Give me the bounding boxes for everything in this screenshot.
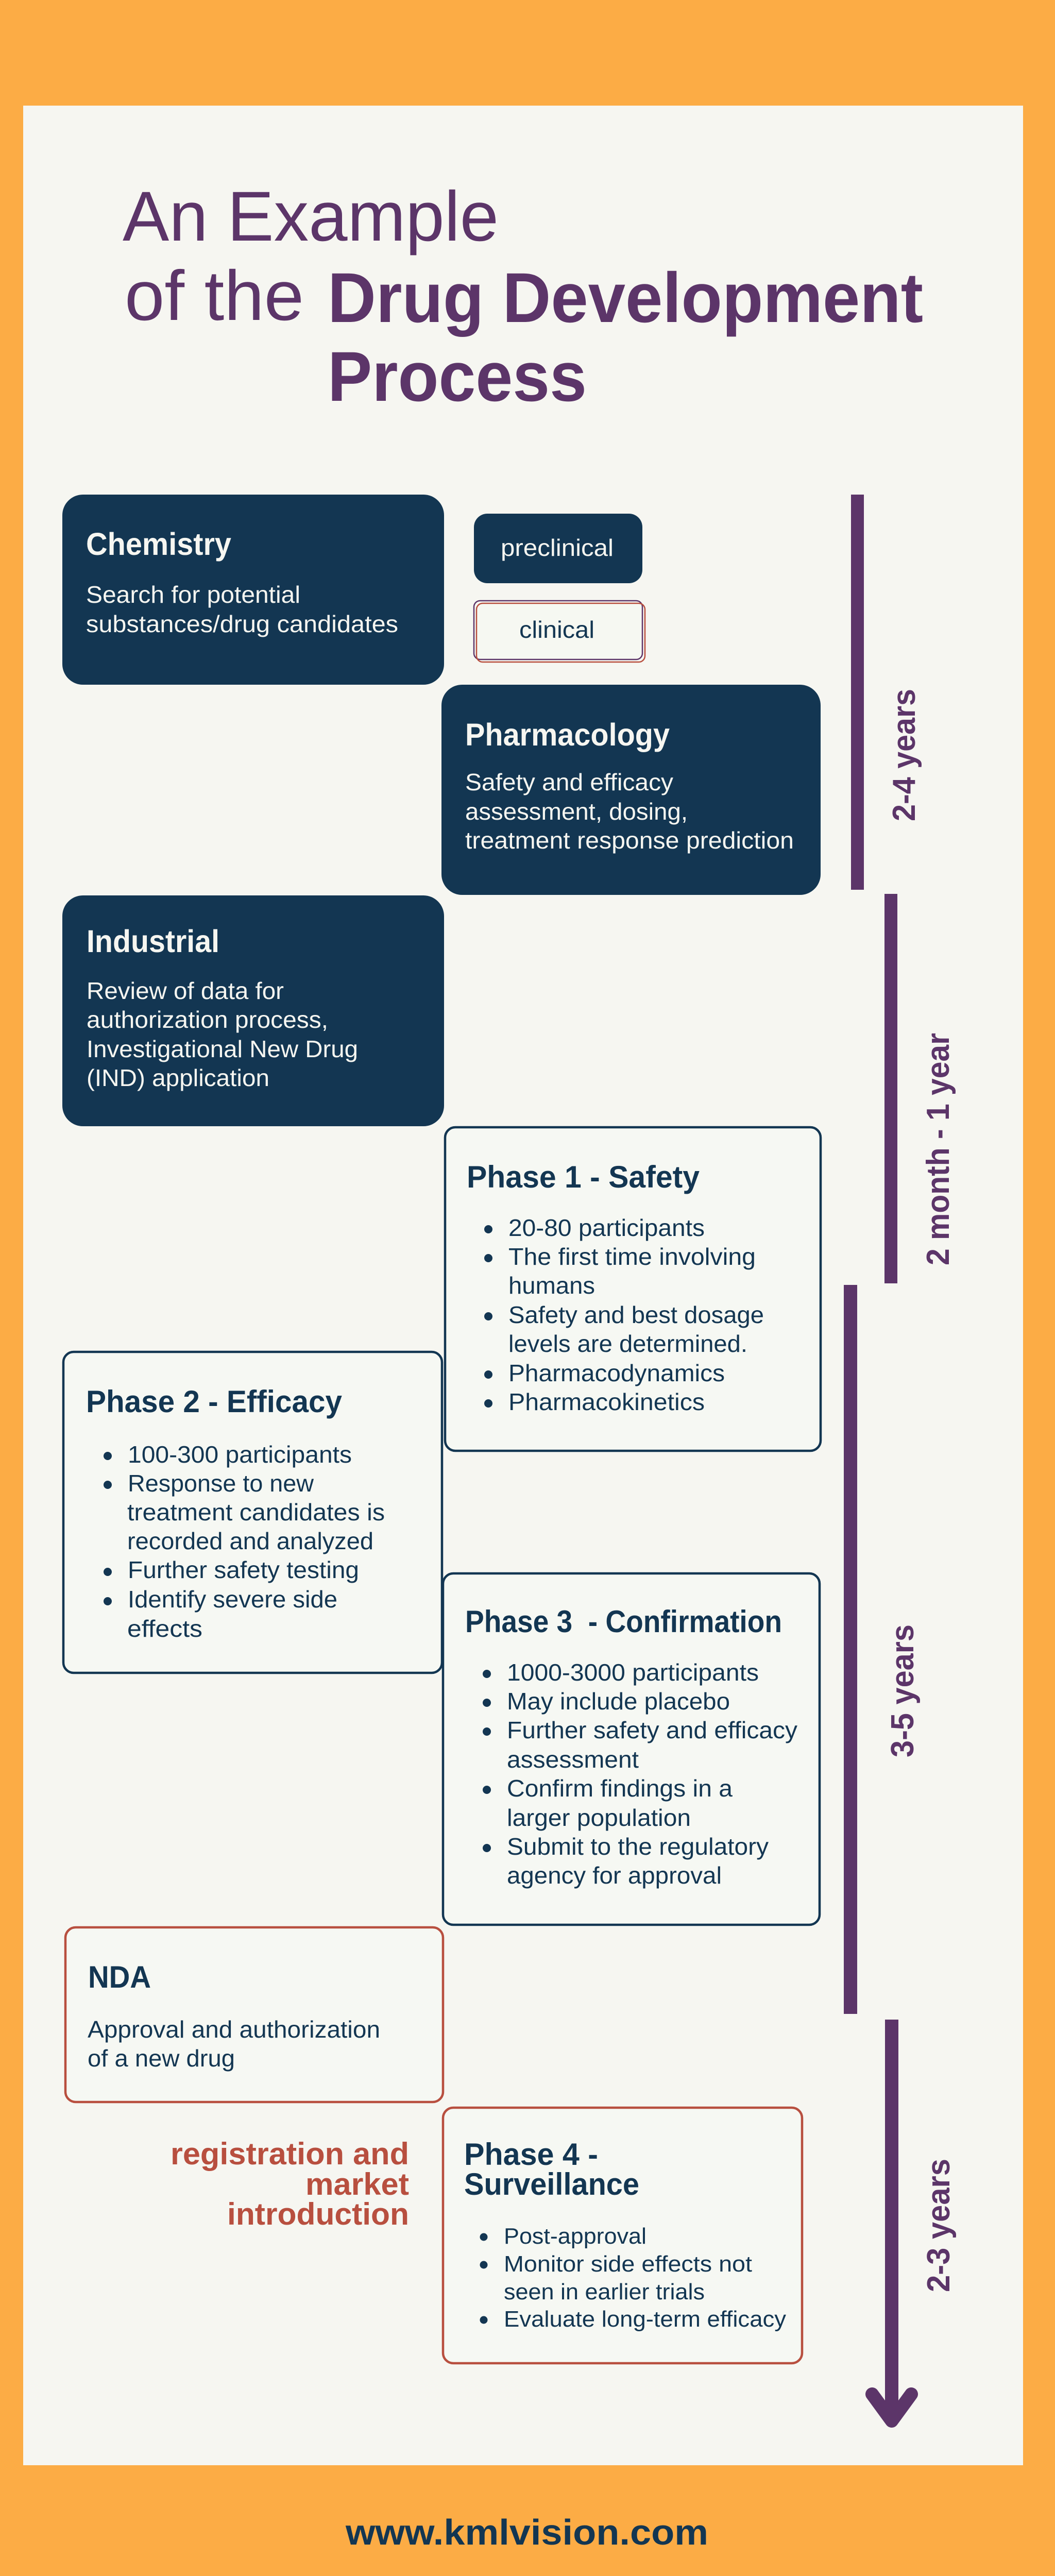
timeline bar: 2 month - 1 year: 2 month - 1 year xyxy=(921,1033,956,1265)
list: phase 3: assessment xyxy=(507,1746,639,1773)
list: phase 1: Pharmacodynamics xyxy=(508,1360,725,1386)
text: chemistry description xyxy=(86,581,398,637)
heading: NDA: NDA xyxy=(88,1960,151,1994)
text: industrial description: Review of data for xyxy=(87,977,284,1004)
panel: industrial xyxy=(62,895,444,1126)
text: NDA description xyxy=(88,2016,380,2072)
panel: phase 3 xyxy=(443,1573,820,1925)
heading: phase 4: Phase 4 - xyxy=(464,2137,598,2172)
list: phase 1: levels are determined. xyxy=(508,1330,747,1357)
text: industrial description: Investigational New Drug xyxy=(87,1036,358,1062)
list: phase 4: Monitor side effects not xyxy=(504,2251,752,2277)
title: An Example xyxy=(123,177,499,256)
heading: chemistry: Chemistry xyxy=(86,527,231,562)
list: phase 1: Pharmacokinetics xyxy=(508,1388,705,1415)
text: registration and market introduction: introduction xyxy=(227,2197,409,2231)
list: phase 4: seen in earlier trials xyxy=(504,2279,705,2304)
heading: phase 4: Surveillance xyxy=(464,2167,639,2201)
list: phase 3: Submit to the regulatory xyxy=(507,1833,769,1860)
footer url: www.kmlvision.com xyxy=(345,2512,708,2552)
list: phase 2 xyxy=(104,1441,385,1642)
timeline bar: 2 month - 1 year xyxy=(884,894,956,1283)
heading: phase 4 xyxy=(464,2137,639,2201)
list: phase 4: Post-approval xyxy=(504,2224,646,2249)
list: phase 3: Confirm findings in a xyxy=(507,1775,733,1802)
title xyxy=(123,177,923,416)
legend: clinical: clinical xyxy=(519,616,594,643)
list: phase 3: May include placebo xyxy=(507,1688,730,1715)
text: NDA description: Approval and authorization xyxy=(88,2016,380,2043)
panel: phase 1 xyxy=(445,1127,821,1451)
timeline bar: 3-5 years: 3-5 years xyxy=(885,1624,921,1757)
legend: clinical xyxy=(474,601,645,662)
timeline bar: 2-4 years xyxy=(851,495,922,890)
heading: phase 3: Phase 3 - Confirmation xyxy=(465,1604,782,1639)
heading: pharmacology: Pharmacology xyxy=(465,717,670,752)
timeline bar: 2-4 years: 2-4 years xyxy=(887,689,922,821)
text: registration and market introduction xyxy=(171,2137,409,2231)
list: phase 1: humans xyxy=(508,1272,595,1299)
list: phase 4 xyxy=(480,2224,786,2332)
timeline bar: 3-5 years xyxy=(844,1285,921,2014)
text: pharmacology description: Safety and efficacy xyxy=(465,769,673,795)
list: phase 3 xyxy=(483,1659,797,1889)
text: registration and market introduction: registration and xyxy=(171,2137,409,2171)
text: chemistry description: Search for potential xyxy=(86,581,300,608)
list: phase 1: The first time involving xyxy=(508,1243,756,1270)
list: phase 3: 1000-3000 participants xyxy=(507,1659,759,1686)
title: Drug Development xyxy=(328,259,923,337)
text: NDA description: of a new drug xyxy=(88,2045,235,2072)
legend: preclinical: preclinical xyxy=(501,534,614,561)
list: phase 1: 20-80 participants xyxy=(508,1214,705,1241)
arrow: 2-3 years: 2-3 years xyxy=(921,2159,957,2292)
panel: phase 4 xyxy=(443,2108,802,2363)
text: registration and market introduction: market xyxy=(305,2167,409,2201)
text: pharmacology description: treatment response prediction xyxy=(465,827,794,854)
list: phase 2: Further safety testing xyxy=(128,1556,359,1583)
list: phase 2: recorded and analyzed xyxy=(127,1528,373,1554)
list: phase 2: effects xyxy=(127,1615,202,1642)
list: phase 3: Further safety and efficacy xyxy=(507,1717,797,1743)
arrow: 2-3 years xyxy=(872,2020,957,2421)
text: industrial description: (IND) application xyxy=(87,1064,269,1091)
list: phase 1 xyxy=(484,1214,764,1415)
text: industrial description: authorization process, xyxy=(87,1006,328,1033)
text: chemistry description: substances/drug candidates xyxy=(86,611,398,637)
title: Process xyxy=(328,337,587,416)
list: phase 3: agency for approval xyxy=(507,1862,722,1889)
panel: NDA xyxy=(65,1927,443,2102)
panel: pharmacology xyxy=(441,685,821,895)
panel: chemistry xyxy=(62,495,444,685)
title: of the xyxy=(125,257,304,335)
legend: preclinical xyxy=(474,514,642,583)
list: phase 3: larger population xyxy=(507,1804,691,1831)
panel: phase 2 xyxy=(63,1352,442,1673)
heading: phase 1: Phase 1 - Safety xyxy=(467,1160,700,1194)
list: phase 2: treatment candidates is xyxy=(127,1499,385,1526)
list: phase 2: Response to new xyxy=(128,1470,314,1497)
heading: industrial: Industrial xyxy=(87,924,219,959)
list: phase 1: Safety and best dosage xyxy=(508,1301,764,1328)
heading: phase 2: Phase 2 - Efficacy xyxy=(86,1384,343,1419)
text: industrial description xyxy=(87,977,358,1091)
text: pharmacology description xyxy=(465,769,794,854)
list: phase 2: Identify severe side xyxy=(128,1586,337,1613)
list: phase 4: Evaluate long-term efficacy xyxy=(504,2307,786,2332)
text: pharmacology description: assessment, dosing, xyxy=(465,798,688,825)
list: phase 2: 100-300 participants xyxy=(128,1441,352,1468)
